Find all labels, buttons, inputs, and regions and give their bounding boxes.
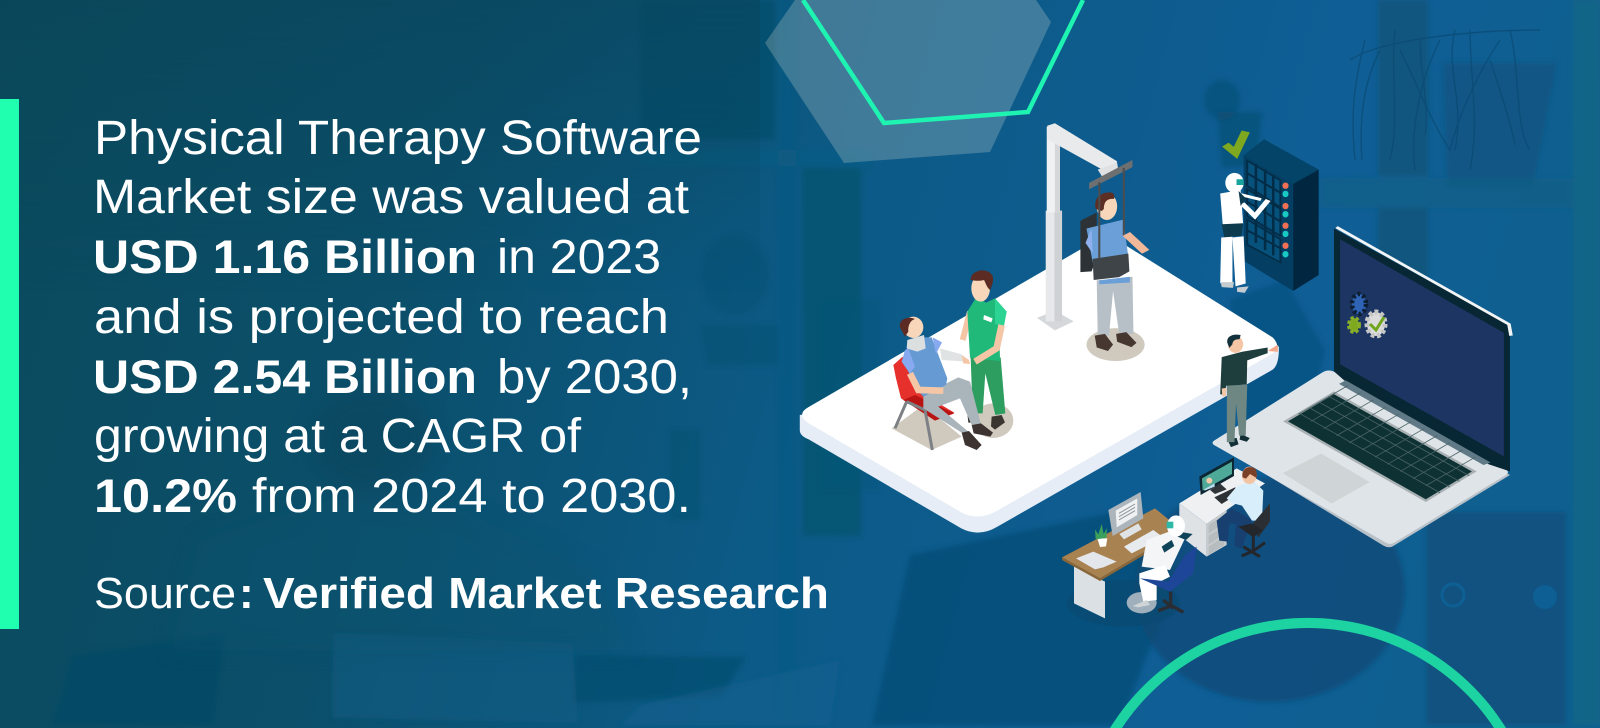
illustration: isometric scene: [800, 123, 1511, 547]
keyboard on wood desk: [1124, 530, 1163, 553]
source line: Verified Market Research: [263, 569, 829, 618]
main text block: Market size was valued at: [93, 171, 689, 224]
background: binder rings: [1442, 584, 1557, 609]
office chair: [1238, 503, 1270, 557]
main text block: USD 1.16 Billion: [93, 230, 477, 283]
background: hanging plants: [1350, 30, 1540, 170]
main text block: 10.2%: [94, 469, 237, 522]
seated worker: [1217, 467, 1263, 548]
seated robot: [1127, 515, 1197, 613]
main text block: and is projected to reach: [94, 291, 669, 344]
illustration: patient and therapist: [892, 270, 1013, 450]
chair: [893, 357, 954, 450]
main text block: [93, 112, 702, 523]
source line: Source: [94, 569, 236, 618]
background: top shade: [0, 0, 760, 728]
plant: [1095, 524, 1107, 547]
therapist: [963, 270, 1007, 430]
floor shadow: [1067, 580, 1180, 627]
suspended man: [1080, 168, 1146, 361]
main text block: in 2023: [497, 231, 661, 284]
desktop monitor: [1108, 492, 1143, 539]
patient: [900, 317, 993, 450]
pole frame: [1037, 123, 1132, 330]
server rack: [1244, 139, 1319, 291]
accent bar: [0, 99, 19, 629]
check mark: [1225, 131, 1246, 153]
main text block: by 2030,: [497, 351, 692, 404]
standing man: [1220, 335, 1278, 447]
keyboard on white desk: [1214, 487, 1242, 504]
platform: [800, 237, 1279, 533]
wood desk: [1062, 508, 1182, 618]
main text block: USD 2.54 Billion: [93, 350, 477, 403]
floor shadows: [892, 403, 1013, 450]
main text block: Physical Therapy Software: [94, 112, 702, 165]
hexagon outline: [803, 0, 1083, 123]
source line: :: [239, 569, 254, 618]
monitor with video call: [1199, 457, 1234, 495]
background: doctor silhouette: [170, 388, 630, 650]
translucent hexagon: [765, 0, 1051, 163]
illustration: desks and workers: [1062, 457, 1270, 627]
laptop: [1213, 227, 1511, 547]
arc decoration: [1110, 618, 1506, 728]
white desk: [1179, 468, 1265, 557]
robot at rack: [1220, 173, 1268, 293]
icon: gears with check: [1349, 294, 1385, 336]
main text block: from 2024 to 2030.: [252, 470, 691, 523]
main text block: growing at a CAGR of: [94, 410, 582, 463]
